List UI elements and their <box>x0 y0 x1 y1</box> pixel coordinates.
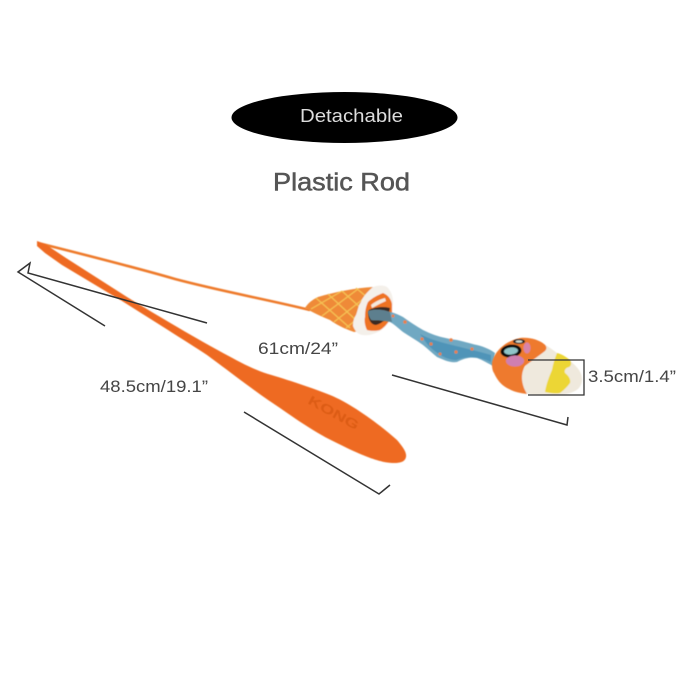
handle logo: KONG <box>306 393 362 433</box>
string <box>38 243 310 310</box>
white cream rim <box>353 286 393 335</box>
product: ice cream cone <box>305 286 393 335</box>
dimension line: handle length <box>244 412 390 494</box>
dimension line: string and toy length <box>392 375 568 425</box>
label: 61cm/24: 61cm/24” <box>258 339 338 358</box>
product: blue ribbon <box>368 309 495 366</box>
heading: Plastic Rod: Plastic Rod <box>273 168 410 196</box>
cone body <box>305 287 373 332</box>
dimension line: rod length <box>18 263 207 326</box>
dimension bracket: toy size <box>528 360 584 395</box>
white cream <box>522 342 582 395</box>
waffle pattern <box>311 288 368 328</box>
yellow drip <box>545 353 571 393</box>
label: 48.5cm/19.1: 48.5cm/19.1” <box>100 377 208 396</box>
pink cheeks <box>506 356 524 366</box>
brow <box>513 339 525 344</box>
orange ball <box>492 338 546 394</box>
product: ice cream scoop toy <box>492 338 582 395</box>
product: plastic rod and string <box>37 241 406 463</box>
badge: Detachable: Detachable <box>300 106 403 126</box>
badge: Detachable <box>232 92 458 143</box>
label: 3.5cm/1.4: 3.5cm/1.4” <box>588 367 676 386</box>
rod handle <box>37 241 406 463</box>
eye <box>500 343 522 359</box>
cone opening <box>365 293 392 331</box>
